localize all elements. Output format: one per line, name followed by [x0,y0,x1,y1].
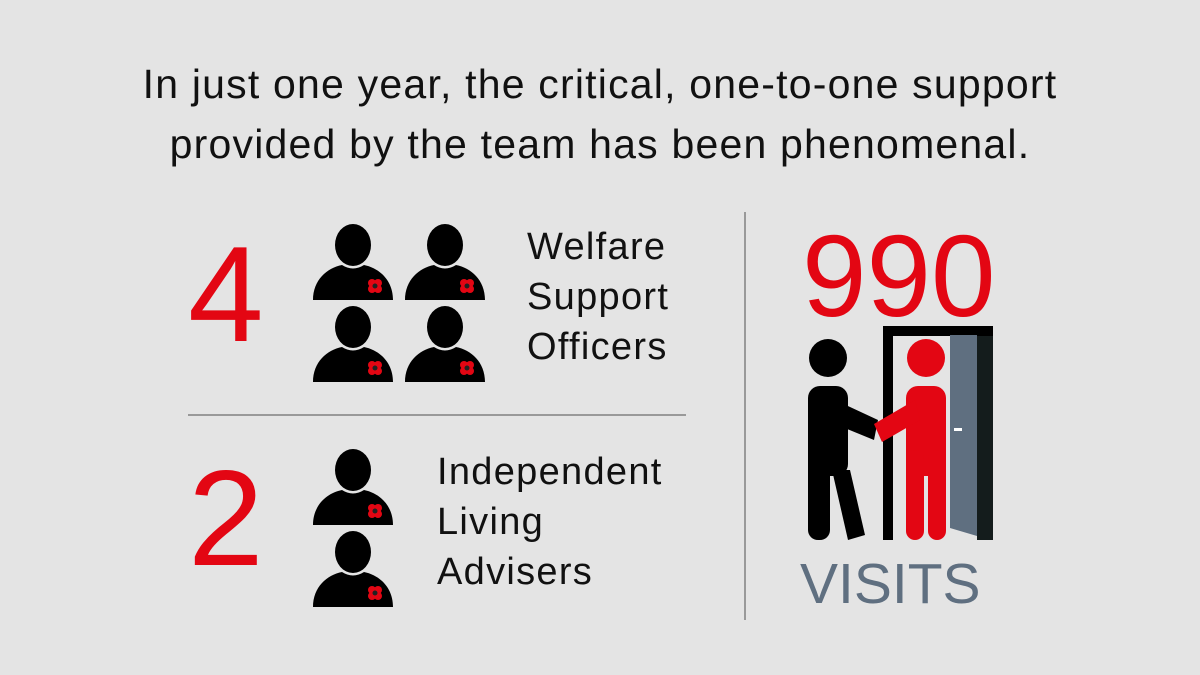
label: independent living advisers: Living [437,501,544,543]
label: welfare support officers: Officers [527,326,668,368]
label: welfare support officers: Support [527,276,669,318]
label: independent living advisers: Advisers [437,551,593,593]
label: independent living advisers: Independent [437,451,663,493]
number: 4: 4 [188,218,264,370]
icon: handshake at door [808,326,993,540]
number: 990: 990 [802,211,996,341]
title [143,61,1057,167]
number: 2: 2 [188,442,264,594]
icons: two advisers [313,449,393,607]
label: independent living advisers [437,451,663,593]
title: provided by the team has been phenomenal. [170,121,1030,167]
icons: four welfare officers [313,224,485,382]
label: welfare support officers: Welfare [527,226,666,268]
title: In just one year, the critical, one-to-one support [143,61,1057,107]
label: welfare support officers [527,226,669,368]
label: visits: VISITS [800,552,981,616]
